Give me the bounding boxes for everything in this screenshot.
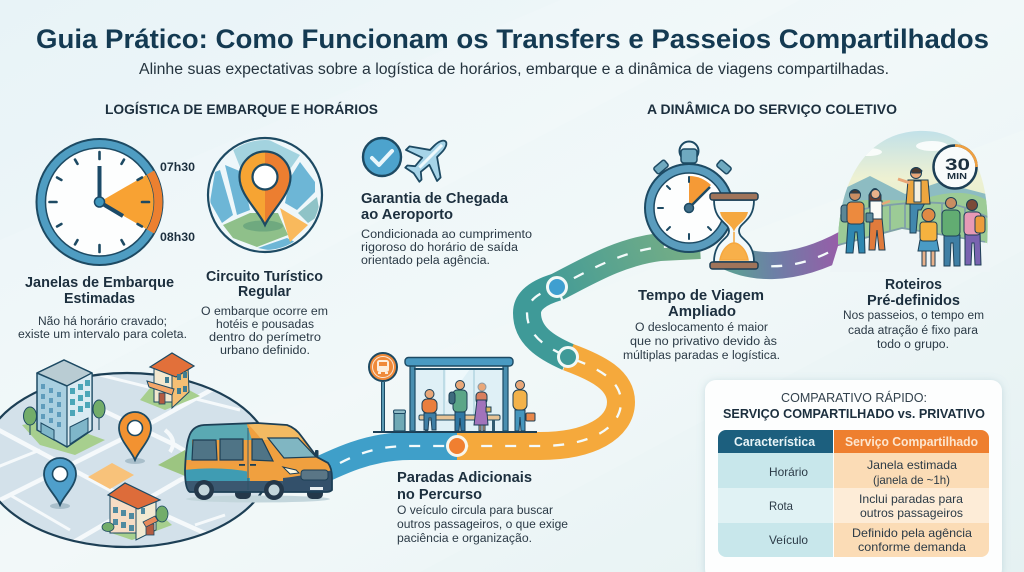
heading: logistics section: LOGÍSTICA DE EMBARQUE E HORÁRIOS	[105, 102, 378, 117]
label: 07h30: 07h30	[160, 160, 195, 174]
tourist: woman with phone	[866, 188, 890, 250]
text block: cada atração é fixo para	[848, 325, 979, 337]
icon: airplane	[397, 126, 461, 190]
heading: Regular	[238, 284, 291, 300]
icon: stopwatch	[645, 142, 733, 252]
heading: ao Aeroporto	[361, 207, 453, 223]
text block: existe um intervalo para coleta.	[18, 329, 187, 341]
text block: Nos passeios, o tempo em	[843, 310, 984, 322]
heading: Ampliado	[668, 304, 736, 320]
tourist: green shirt	[942, 198, 960, 266]
text block: dentro do perímetro	[209, 332, 321, 344]
guide	[898, 168, 930, 233]
tower building	[22, 360, 105, 455]
heading	[361, 191, 509, 223]
text block: Não há horário cravado;	[38, 316, 167, 328]
heading	[867, 277, 960, 309]
bench	[419, 415, 500, 431]
panel: comparison table	[705, 380, 1002, 572]
text block: Condicionada ao cumprimento	[361, 229, 532, 241]
table: Serviço Compartilhado	[845, 434, 978, 449]
pin: blue	[44, 458, 76, 509]
text block: orientado pela agência.	[361, 255, 490, 267]
heading: Paradas Adicionais	[397, 470, 532, 486]
trash bin	[394, 410, 406, 431]
tourist: child	[918, 208, 939, 266]
title: Guia Prático: Como Funcionam os Transfers e Passeios Compartilhados	[36, 24, 989, 54]
text block	[361, 229, 532, 267]
table: Rota	[769, 499, 793, 513]
table title: SERVIÇO COMPARTILHADO vs. PRIVATIVO	[723, 406, 985, 421]
text block: que no privativo devido às	[630, 336, 777, 348]
panel: roteiros pré-definidos	[830, 128, 991, 351]
text block	[201, 306, 328, 357]
text block	[623, 322, 780, 362]
table	[718, 430, 989, 557]
table: Janela estimada	[867, 458, 957, 472]
table title: COMPARATIVO RÁPIDO:	[781, 390, 927, 405]
text block: paciência e organização.	[397, 533, 532, 545]
panel: tempo de viagem	[623, 142, 780, 362]
table: Inclui paradas para	[859, 492, 963, 506]
text block: todo o grupo.	[877, 339, 949, 351]
heading: Estimadas	[64, 291, 135, 307]
heading: no Percurso	[397, 487, 482, 503]
text block: múltiplas paradas e logística.	[623, 350, 780, 362]
tourist: backpack man	[841, 190, 865, 253]
text block	[843, 310, 984, 351]
illustration: tour group	[830, 128, 991, 272]
panel: circuito turístico	[201, 138, 328, 357]
text block: hotéis e pousadas	[216, 319, 314, 331]
text block: outros passageiros, o que exige	[397, 519, 568, 531]
road stop marker: teal	[558, 348, 578, 366]
road	[300, 243, 847, 480]
heading	[206, 269, 323, 300]
icon: clock	[36, 139, 162, 265]
heading: Garantia de Chegada	[361, 191, 509, 207]
panel: paradas adicionais	[397, 470, 568, 545]
text block: O deslocamento é maior	[635, 322, 768, 334]
table: (janela de ~1h)	[873, 473, 950, 487]
icon: map pin in circle	[208, 138, 322, 252]
text block: O veículo circula para buscar	[397, 505, 553, 517]
trees	[24, 400, 105, 435]
heading: dynamics section: A DINÂMICA DO SERVIÇO COLETIVO	[647, 102, 897, 117]
icon: hourglass	[710, 193, 758, 269]
subtitle: Alinhe suas expectativas sobre a logística de horários, embarque e a dinâmica de viagens compartilhadas.	[139, 61, 889, 78]
text block: rigoroso do horário de saída	[361, 242, 519, 254]
table: conforme demanda	[858, 540, 966, 554]
bus stop sign	[369, 353, 397, 431]
clock: 30 min: 30	[945, 155, 970, 174]
heading	[397, 470, 532, 503]
shelter	[405, 358, 513, 431]
tourist: pink shirt with backpack	[964, 200, 985, 265]
road stop marker: orange	[448, 436, 466, 456]
heading	[25, 275, 174, 307]
table: Horário	[769, 465, 808, 479]
illustration: bus stop	[369, 353, 537, 433]
clock: 30 min	[934, 146, 976, 188]
illustration: neighbourhood map	[0, 353, 272, 550]
panel: janelas de embarque	[18, 139, 195, 341]
heading: Circuito Turístico	[206, 269, 323, 285]
table: outros passageiros	[860, 506, 963, 520]
heading: Roteiros	[885, 277, 942, 293]
heading	[638, 288, 764, 320]
text block: urbano definido.	[220, 345, 310, 357]
house top	[140, 353, 200, 410]
illustration: van	[184, 422, 334, 502]
heading: Pré-definidos	[867, 293, 960, 309]
people waiting	[422, 380, 535, 431]
road stop marker: blue	[548, 278, 566, 296]
table title	[723, 390, 985, 421]
heading: Janelas de Embarque	[25, 275, 174, 291]
icon: check badge	[363, 138, 401, 176]
heading: Tempo de Viagem	[638, 288, 764, 304]
table: Definido pela agência	[852, 526, 972, 540]
table: Característica	[734, 434, 816, 449]
house bottom	[102, 483, 172, 540]
panel: garantia de chegada	[361, 126, 532, 267]
clock: 30 min: MIN	[947, 172, 967, 181]
pin: orange	[119, 412, 151, 464]
label: 08h30: 08h30	[160, 230, 195, 244]
text block: O embarque ocorre em	[201, 306, 328, 318]
text block	[18, 316, 187, 341]
table: Veículo	[769, 533, 808, 547]
text block	[397, 505, 568, 545]
